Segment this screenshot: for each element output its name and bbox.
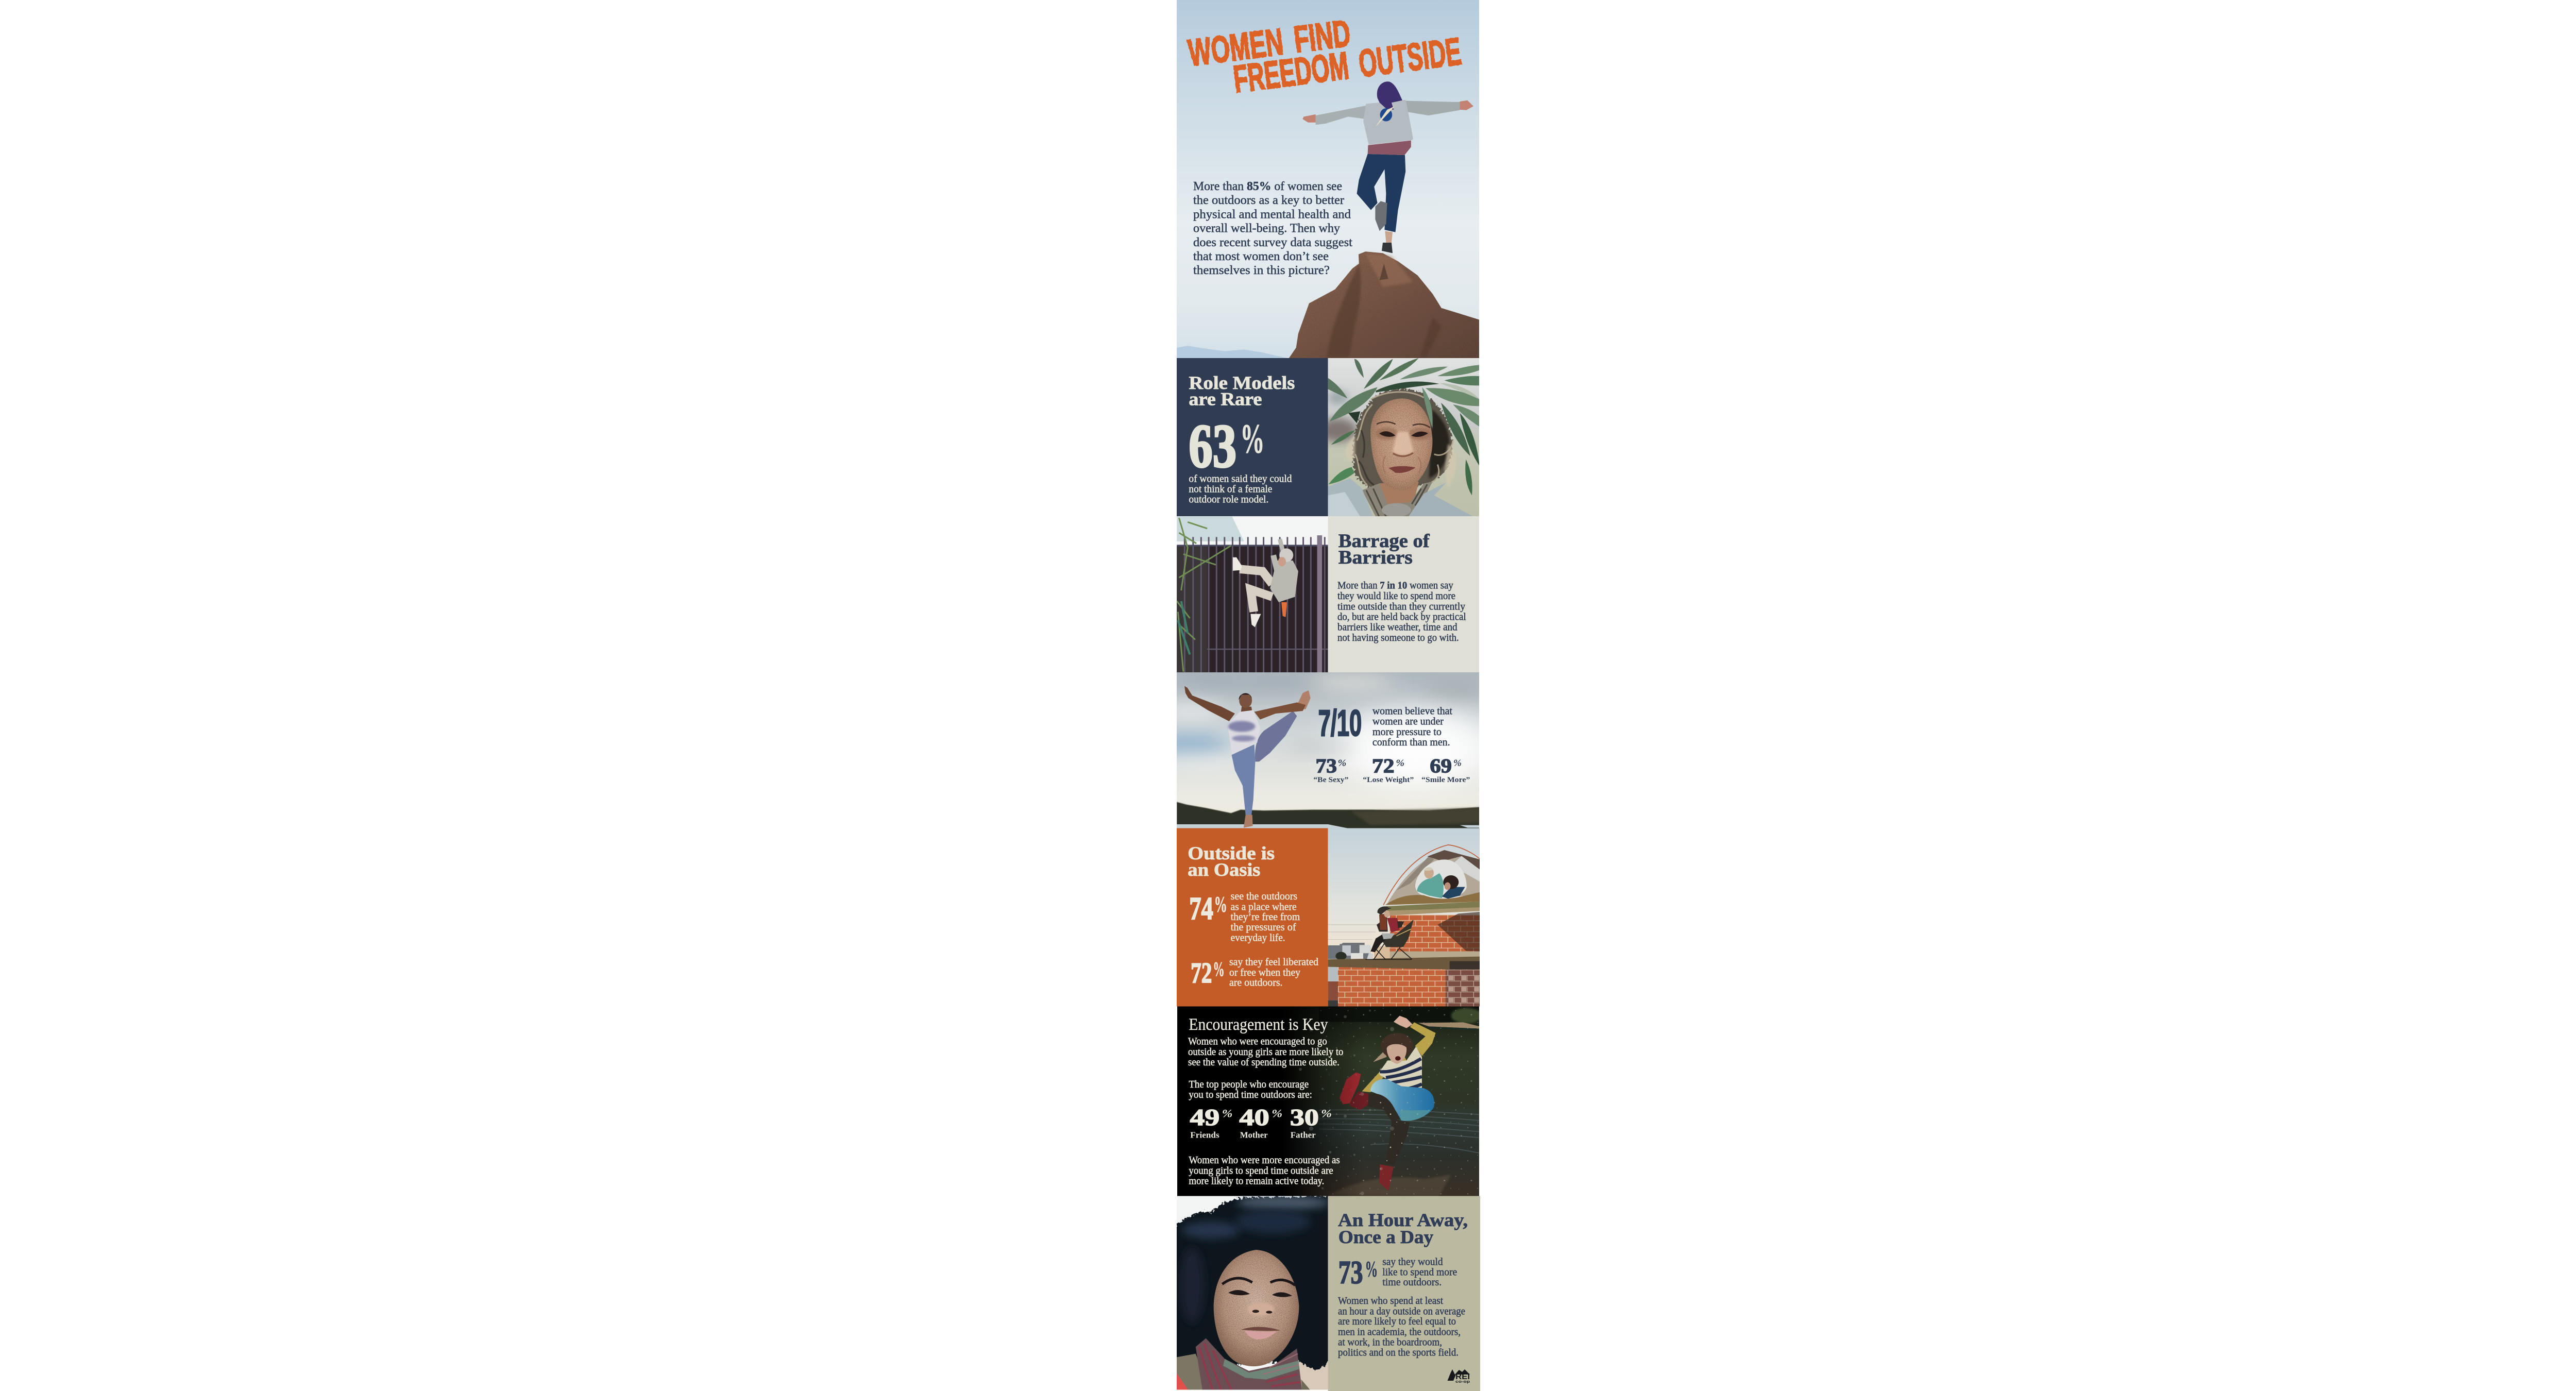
- text: hour away body: an hour a day outside on average: [1338, 1305, 1465, 1317]
- heading: outside is an oasis: Outside is: [1188, 843, 1275, 863]
- stat: 72% lose weight: %: [1396, 758, 1404, 769]
- logo: REI co-op: REI: [1455, 1372, 1470, 1381]
- heading: barrage of barriers: Barrage of: [1338, 531, 1430, 552]
- text: 72% description: are outdoors.: [1229, 977, 1283, 989]
- girl: [1362, 1073, 1383, 1092]
- intro text: themselves in this picture?: [1193, 264, 1330, 277]
- stat: 49% friends: Friends: [1190, 1130, 1219, 1140]
- photo: woman climbing fence: [1177, 516, 1328, 674]
- panel: barrage of barriers: [1328, 516, 1479, 672]
- upper brick wall: [1390, 915, 1480, 952]
- panel: encouragement is key: [1177, 1006, 1482, 1196]
- stat: 30% father: [1290, 1104, 1332, 1140]
- text: pressure stat: women believe that: [1372, 705, 1452, 717]
- text: role model stat: not think of a female: [1189, 483, 1273, 495]
- stat: 30% father: 30: [1290, 1104, 1319, 1130]
- heading: role models: [1189, 372, 1295, 410]
- text: barriers body: do, but are held back by practical: [1337, 611, 1466, 622]
- intro text: does recent survey data suggest: [1193, 236, 1352, 249]
- intro text: that most women don’t see: [1193, 250, 1329, 263]
- text: encouragement closing: young girls to spend time outside are: [1189, 1165, 1333, 1177]
- stat: 72% lose weight: 72: [1372, 755, 1394, 777]
- face: [1214, 1250, 1299, 1366]
- infographic: [1177, 0, 1480, 1391]
- heading: an hour away once a day: Once a Day: [1338, 1227, 1433, 1247]
- text: pressure stat: [1372, 705, 1452, 748]
- stat: 72% lose weight: “Lose Weight”: [1363, 776, 1414, 784]
- text: hour away body: [1338, 1295, 1465, 1358]
- stat: 49% friends: 49: [1190, 1104, 1219, 1130]
- stat: 73% be sexy: 73: [1316, 755, 1337, 777]
- logo: REI co-op: [1448, 1369, 1470, 1384]
- stat: 49% friends: %: [1222, 1107, 1232, 1120]
- hair: [1353, 389, 1452, 490]
- heading: encouragement is key: Encouragement is Key: [1189, 1015, 1328, 1034]
- tent: [1387, 856, 1480, 904]
- stat: 30% father: %: [1321, 1107, 1332, 1120]
- heading: outside is an oasis: an Oasis: [1188, 859, 1260, 880]
- stat: 69% smile more: “Smile More”: [1421, 776, 1470, 784]
- text: hour away body: at work, in the boardroom,: [1338, 1337, 1442, 1348]
- stat: 49% friends: [1190, 1104, 1232, 1140]
- text: barriers body: barriers like weather, time and: [1337, 622, 1458, 633]
- text: encouragement closing: Women who were more encouraged as: [1189, 1155, 1340, 1166]
- jacket and scarf: [1177, 1354, 1211, 1391]
- text: barriers body: time outside than they currently: [1337, 601, 1465, 612]
- lower brick wall: [1445, 969, 1480, 1007]
- photo: woman with leaf crown: [1319, 358, 1480, 517]
- stat: 63%: 63: [1189, 412, 1236, 480]
- text: 74% description: everyday life.: [1231, 932, 1285, 944]
- heading: an hour away once a day: [1338, 1210, 1468, 1247]
- text: 73% description: [1382, 1256, 1457, 1288]
- panel: an hour away: [1328, 1196, 1480, 1391]
- text: barriers body: not having someone to go with.: [1337, 632, 1459, 643]
- text: top encouragers: The top people who encourage: [1189, 1079, 1309, 1090]
- text: hour away body: politics and on the sports field.: [1338, 1347, 1459, 1358]
- heading: barrage of barriers: [1338, 531, 1430, 568]
- stat: 40% mother: Mother: [1240, 1130, 1268, 1140]
- title: WOMEN FIND: [1186, 12, 1353, 74]
- intro text: physical and mental health and: [1193, 208, 1351, 222]
- text: encouragement closing: more likely to remain active today.: [1189, 1175, 1324, 1186]
- text: encouragement closing: [1189, 1155, 1340, 1186]
- text: hour away body: men in academia, the outdoors,: [1338, 1326, 1461, 1337]
- stat: 7/10: 7/10: [1318, 703, 1362, 744]
- text: 73% description: say they would: [1382, 1256, 1443, 1267]
- heading: outside is an oasis: [1188, 843, 1275, 880]
- stat: 74%: 74: [1189, 891, 1213, 926]
- photo: woman in yoga pose: [1177, 672, 1479, 828]
- scarf and jacket: [1362, 482, 1432, 517]
- stat: 69% smile more: %: [1453, 758, 1462, 769]
- panel: role models are rare: [1177, 358, 1328, 516]
- text: role model stat: [1189, 473, 1292, 505]
- text: pressure stat: conform than men.: [1372, 737, 1450, 748]
- panel: pressure to conform: [1177, 672, 1479, 828]
- text: encouragement intro: Women who were encouraged to go: [1188, 1036, 1327, 1047]
- stat: 73%: %: [1365, 1258, 1378, 1282]
- text: barriers body: they would like to spend more: [1337, 590, 1455, 602]
- stat: 73%: 73: [1338, 1254, 1363, 1291]
- text: 74% description: [1231, 891, 1300, 944]
- intro text: More than 85% of women see: [1193, 180, 1342, 193]
- text: 72% description: [1229, 956, 1318, 989]
- stat: 40% mother: [1239, 1104, 1282, 1140]
- intro text: [1193, 180, 1352, 277]
- photo: campers on brick rooftop: [1328, 828, 1480, 1007]
- stat: 73% be sexy: [1313, 755, 1348, 784]
- stat: 72%: 72: [1191, 957, 1212, 989]
- title: FREEDOM OUTSIDE: [1231, 29, 1464, 101]
- stat: 40% mother: 40: [1239, 1104, 1269, 1130]
- text: hour away body: are more likely to feel equal to: [1338, 1316, 1456, 1327]
- stat: 73% be sexy: %: [1337, 758, 1346, 769]
- woman in chair: [1365, 944, 1412, 959]
- text: encouragement intro: [1188, 1036, 1343, 1068]
- logo: REI co-op: co-op: [1455, 1380, 1470, 1384]
- stat: 74%: %: [1214, 893, 1227, 917]
- stat: 40% mother: %: [1272, 1107, 1282, 1120]
- text: barriers body: [1337, 580, 1466, 643]
- photo: girl splashing in lake: [1177, 1006, 1482, 1196]
- text: 74% description: as a place where: [1231, 901, 1297, 912]
- stat: 69% smile more: 69: [1430, 755, 1452, 777]
- text: 74% description: see the outdoors: [1231, 891, 1297, 902]
- stat: 73% be sexy: “Be Sexy”: [1313, 776, 1348, 784]
- leaves: [1329, 387, 1378, 421]
- intro text: the outdoors as a key to better: [1193, 194, 1344, 207]
- heading: role models: are Rare: [1189, 389, 1262, 410]
- text: pressure stat: more pressure to: [1372, 726, 1442, 738]
- stat: 72% lose weight: [1363, 755, 1414, 784]
- text: pressure stat: women are under: [1372, 716, 1444, 727]
- text: top encouragers: [1189, 1079, 1312, 1100]
- title: [1186, 12, 1464, 101]
- photo: smiling woman with curly hair: [1173, 1196, 1331, 1391]
- intro text: overall well-being. Then why: [1193, 222, 1340, 235]
- text: top encouragers: you to spend time outdoors are:: [1189, 1089, 1312, 1100]
- text: encouragement intro: outside as young girls are more likely to: [1188, 1046, 1343, 1058]
- text: 73% description: like to spend more: [1382, 1266, 1457, 1278]
- text: 73% description: time outdoors.: [1382, 1277, 1442, 1288]
- text: role model stat: outdoor role model.: [1189, 494, 1268, 505]
- heading: an hour away once a day: An Hour Away,: [1338, 1210, 1468, 1230]
- text: 74% description: they’re free from: [1231, 911, 1300, 923]
- panel: hero: [1177, 0, 1479, 358]
- text: barriers body: More than 7 in 10 women say: [1337, 580, 1453, 591]
- panel: outside is an oasis: [1177, 828, 1328, 1007]
- text: encouragement intro: see the value of spending time outside.: [1188, 1057, 1340, 1068]
- text: role model stat: of women said they could: [1189, 473, 1292, 484]
- stat: 69% smile more: [1421, 755, 1470, 784]
- stat: 30% father: Father: [1291, 1130, 1316, 1140]
- text: hour away body: Women who spend at least: [1338, 1295, 1443, 1307]
- heading: role models: Role Models: [1189, 372, 1295, 393]
- photo: woman balancing on rock: [1177, 0, 1479, 358]
- face: [1370, 398, 1432, 490]
- text: 72% description: say they feel liberated: [1229, 956, 1318, 968]
- text: 72% description: or free when they: [1229, 967, 1300, 978]
- stat: 72%: %: [1213, 958, 1225, 981]
- hair: [1173, 1196, 1331, 1369]
- stat: 63%: %: [1241, 417, 1264, 462]
- heading: barrage of barriers: Barriers: [1338, 547, 1413, 568]
- text: 74% description: the pressures of: [1231, 922, 1296, 933]
